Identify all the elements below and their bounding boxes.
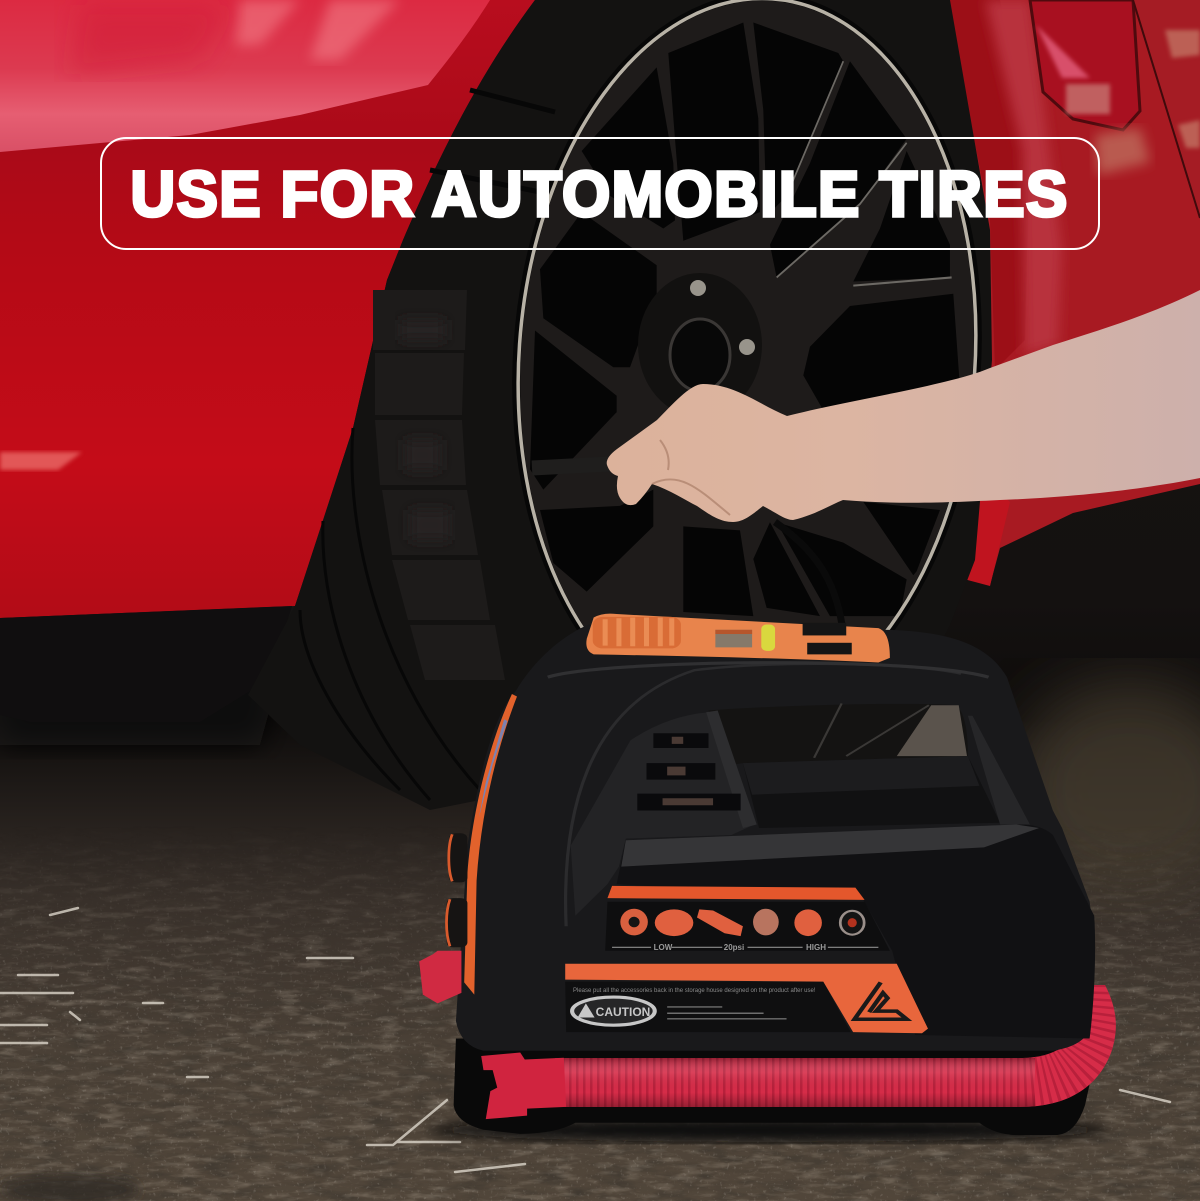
hose connector [481, 1053, 566, 1119]
cable to pump [775, 522, 842, 625]
side knobs and red valve [419, 833, 467, 1003]
tire [248, 0, 992, 810]
wheel windows between spokes [530, 22, 960, 616]
car sill [0, 606, 292, 722]
wheel rim [488, 0, 1006, 743]
title: USE FOR AUTOMOBILE TIRES [131, 158, 1069, 230]
pressure scale labels: HIGH [806, 943, 826, 952]
strut [706, 711, 757, 828]
inflator hose at valve [532, 464, 610, 468]
red hose [555, 985, 1116, 1107]
shadow under car [0, 600, 300, 745]
orange side strip [464, 694, 517, 995]
handle window [708, 704, 968, 765]
pressure scale labels [654, 943, 826, 952]
front icon panel [605, 886, 890, 951]
top control panel [586, 614, 890, 662]
vents [637, 733, 741, 810]
caution text: CAUTION [596, 1005, 650, 1019]
handle contour [566, 664, 961, 926]
main body [419, 614, 1095, 1119]
orange chevron label [565, 964, 928, 1033]
pressure scale labels: 20psi [724, 943, 744, 952]
base tray [454, 1038, 1090, 1135]
pressure scale labels: LOW [654, 943, 673, 952]
recess below handle [743, 756, 1000, 828]
title [100, 137, 1100, 250]
storage note: Please put all the accessories back in the storage house designed on the product after use! [573, 988, 816, 994]
ground [0, 484, 1200, 1201]
hand and arm [607, 290, 1200, 522]
pump [419, 614, 1116, 1135]
red car rear panel [0, 0, 1200, 618]
pump shadow [430, 1118, 1110, 1142]
vent recess [571, 712, 754, 916]
lower shell [617, 825, 1095, 1038]
